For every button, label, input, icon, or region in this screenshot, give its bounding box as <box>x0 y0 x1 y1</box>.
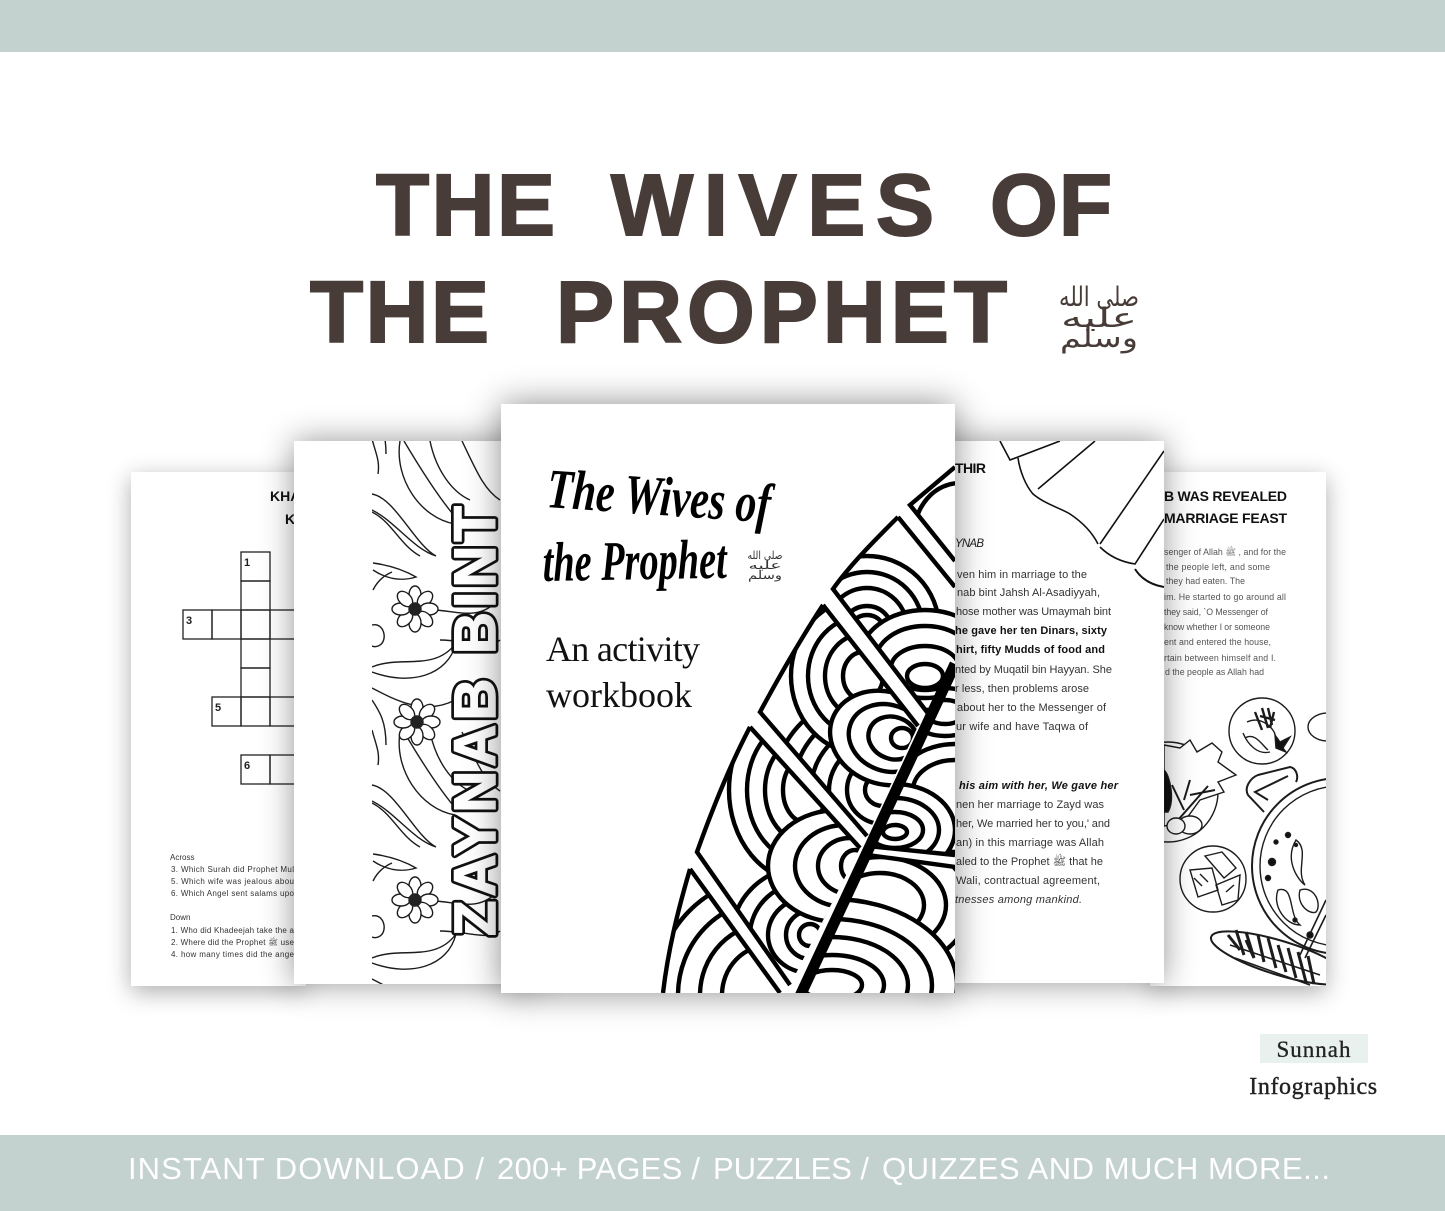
crossword clues <box>170 853 295 959</box>
crossword numbers: 1 <box>244 557 250 569</box>
crossword clues: 5. Which wife was jealous abou <box>171 877 294 886</box>
body text: nted by Muqatil bin Hayyan. She <box>955 664 1112 676</box>
body text: hose mother was Umaymah bint <box>956 606 1111 618</box>
body text: hirt, fifty Mudds of food and <box>956 644 1105 656</box>
illustration: dress outline <box>1000 441 1164 587</box>
cover subtitle: workbook <box>546 675 692 715</box>
feather spine <box>800 664 955 996</box>
body text: an) in this marriage was Allah <box>956 837 1104 849</box>
icon: small salawat calligraphy <box>748 549 782 582</box>
title line 2 <box>310 264 1007 361</box>
meal page heading: MARRIAGE FEAST <box>1164 510 1287 526</box>
crossword clues: 6. Which Angel sent salams upo <box>171 889 295 898</box>
title line 2: PROPHET <box>556 264 1007 361</box>
panel: Ibn Kathir text page <box>930 441 1164 983</box>
icon: salawat calligraphy: وسلم <box>1060 323 1138 354</box>
crossword clues: 3. Which Surah did Prophet Mul <box>171 865 294 874</box>
meal page text: d the people as Allah had <box>1165 667 1264 677</box>
cover subtitle: An activity <box>546 629 700 669</box>
icon: salawat calligraphy: عليه <box>1061 303 1137 334</box>
crossword grid <box>183 552 299 784</box>
crossword clues: Down <box>170 913 190 922</box>
title line 1: THE <box>376 157 555 254</box>
cover title <box>542 458 777 594</box>
meal page text: they said, `O Messenger of <box>1164 607 1269 617</box>
bottom banner <box>0 1135 1445 1211</box>
crossword heading <box>270 488 378 527</box>
title line 1: WIVES <box>611 157 934 254</box>
body text: her, We married her to you,' and <box>956 818 1110 830</box>
banner text: PUZZLES / <box>713 1151 869 1186</box>
feather band outlines <box>663 467 955 993</box>
body text: r less, then problems arose <box>955 683 1089 695</box>
body text: Wali, contractual agreement, <box>956 875 1100 887</box>
body text: about her to the Messenger of <box>957 702 1107 714</box>
crossword clues: 2. Where did the Prophet ﷺ use <box>171 936 295 947</box>
icon: small salawat calligraphy: عليه <box>748 559 782 572</box>
vertical heading: ZAYNAB BINT: ZAYNAB BINT <box>443 506 508 936</box>
watermark tag: Sunnah <box>1260 1034 1368 1063</box>
panel: colouring page Zaynab bint <box>294 441 534 984</box>
watermark word: Infographics: Infographics <box>1249 1074 1378 1100</box>
crossword clues: Across <box>170 853 194 862</box>
crossword numbers <box>186 557 250 772</box>
body text: aled to the Prophet ﷺ that he <box>956 853 1103 868</box>
vertical heading: ZAYNAB BINT: ZAYNAB BINT <box>443 506 508 936</box>
title line 1 <box>376 157 1112 254</box>
banner text <box>128 1151 1330 1186</box>
illustration: floral pattern <box>372 441 500 984</box>
meal page text: they had eaten. The <box>1166 576 1245 586</box>
meal page text: im. He started to go around all <box>1164 592 1286 602</box>
body text: nab bint Jahsh Al-Asadiyyah, <box>957 587 1100 599</box>
title line 1: OF <box>990 157 1112 254</box>
cover title: The Wives of <box>545 458 777 536</box>
meal page heading <box>1164 488 1287 526</box>
page subheading: YNAB <box>955 538 984 550</box>
crossword numbers: 5 <box>215 702 221 714</box>
cover subtitle <box>546 629 700 715</box>
body text <box>955 569 1119 906</box>
watermark word: Sunnah <box>1276 1037 1352 1062</box>
meal page text: senger of Allah ﷺ , and for the <box>1164 545 1286 557</box>
meal page text: the people left, and some <box>1166 562 1270 572</box>
banner text: INSTANT DOWNLOAD / <box>128 1151 484 1186</box>
meal page text: rtain between himself and I. <box>1164 653 1276 663</box>
page heading: THIR <box>955 460 986 476</box>
crossword numbers: 3 <box>186 615 192 627</box>
meal page text: know whether I or someone <box>1164 622 1270 632</box>
cover title: the Prophet <box>542 529 728 594</box>
icon: salawat calligraphy <box>1059 282 1139 354</box>
panel: crossword page <box>131 472 306 986</box>
banner text: QUIZZES AND MUCH MORE... <box>882 1151 1330 1186</box>
crossword clues: 4. how many times did the ange <box>171 950 295 959</box>
crossword clues: 1. Who did Khadeejah take the a <box>171 926 295 935</box>
meal page heading: B WAS REVEALED <box>1164 488 1287 504</box>
banner text: 200+ PAGES / <box>497 1151 700 1186</box>
body text: ur wife and have Taqwa of <box>956 721 1089 733</box>
body text: his aim with her, We gave her <box>959 780 1119 792</box>
body text: nen her marriage to Zayd was <box>956 799 1104 811</box>
body text: he gave her ten Dinars, sixty <box>955 625 1108 637</box>
crossword numbers: 6 <box>244 760 250 772</box>
panel: workbook cover <box>501 404 955 993</box>
illustration: food plates <box>1118 698 1428 995</box>
body text: tnesses among mankind. <box>955 894 1082 906</box>
meal page text <box>1164 545 1286 677</box>
icon: small salawat calligraphy: وسلم <box>748 569 782 582</box>
icon: salawat calligraphy: صلى الله <box>1059 282 1139 313</box>
title line 2: THE <box>310 264 489 361</box>
illustration: feather <box>660 465 955 993</box>
top banner <box>0 0 1445 52</box>
meal page text: ent and entered the house, <box>1164 637 1271 647</box>
icon: small salawat calligraphy: صلى الله <box>748 549 782 562</box>
title <box>310 157 1139 361</box>
panel: meal page <box>1150 472 1326 986</box>
body text: ven him in marriage to the <box>957 569 1087 581</box>
